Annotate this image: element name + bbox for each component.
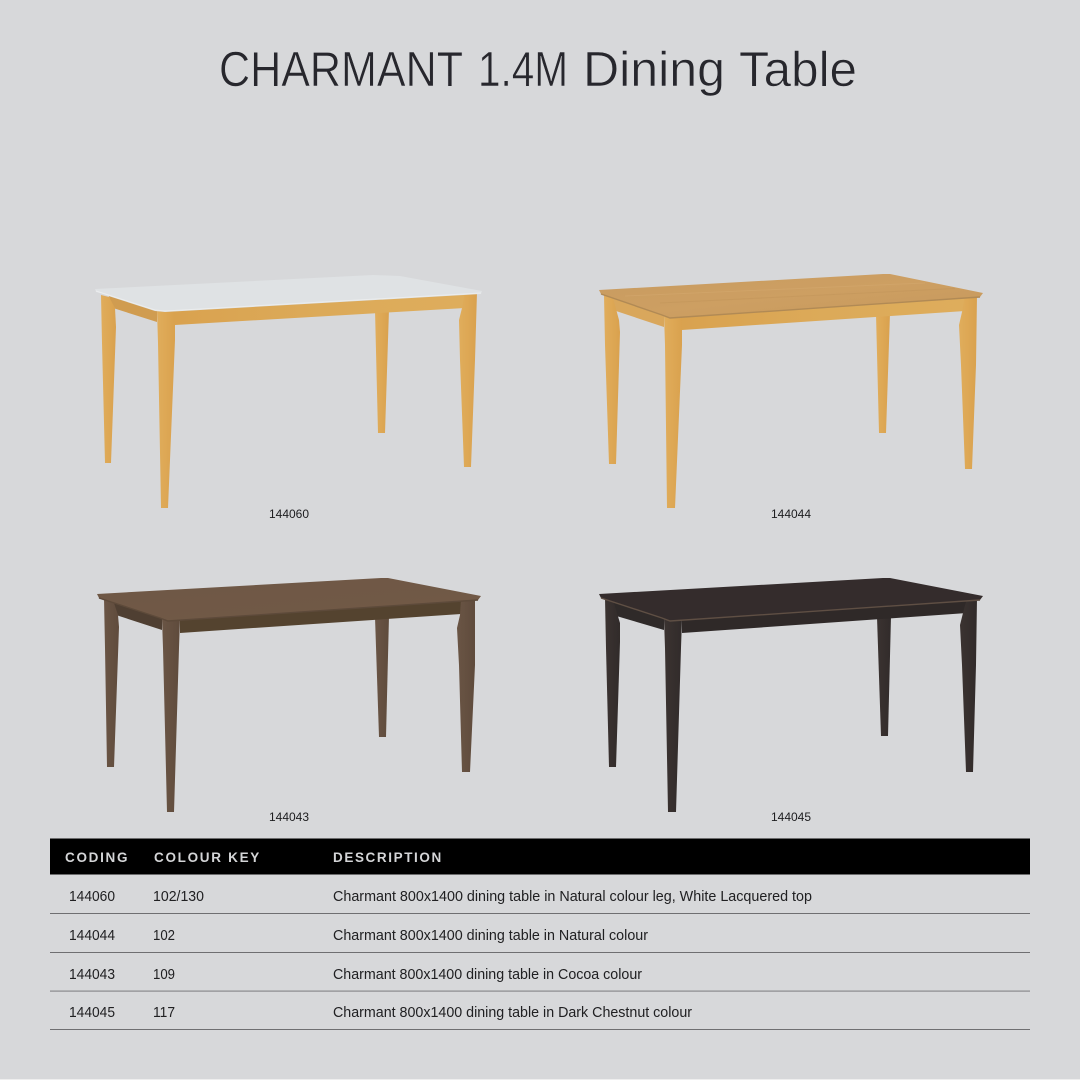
- row: 144060: [50, 889, 1030, 914]
- row: 144060: 144060: [69, 889, 115, 905]
- row: 144044: [50, 928, 1030, 953]
- row: 144045: Charmant 800x1400 dining table in Dark Chestnut colour: [333, 1005, 692, 1021]
- bottom edge strip: [0, 1079, 1080, 1080]
- row: 144044: Charmant 800x1400 dining table in Natural colour: [333, 928, 648, 944]
- row: 144043: 109: [153, 967, 175, 983]
- row: 144045: [50, 1005, 1030, 1030]
- row: 144043: 144043: [69, 967, 115, 983]
- row: 144043: [50, 967, 1030, 992]
- product: table 144043 cocoa: [97, 578, 481, 812]
- row: 144045: 144045: [69, 1005, 115, 1021]
- label: 144043: 144043: [269, 810, 309, 824]
- product: table 144060 natural legs with white top: [95, 275, 482, 508]
- row: 144044: 102: [153, 928, 175, 944]
- product: table 144044 natural: [599, 274, 983, 508]
- row: 144044: 144044: [69, 928, 115, 944]
- title: Dining: [583, 42, 725, 97]
- title: 1.4M: [478, 42, 568, 97]
- table header row: [50, 838, 1030, 874]
- label: 144044: 144044: [771, 507, 811, 521]
- row: 144045: 117: [153, 1005, 175, 1021]
- row: 144060: Charmant 800x1400 dining table in Natural colour leg, White Lacquered top: [333, 889, 812, 905]
- table header row: COLOUR KEY: [154, 850, 261, 865]
- table header row: CODING: [65, 850, 129, 865]
- label: 144060: 144060: [269, 507, 309, 521]
- title: Table: [739, 42, 857, 97]
- row: 144043: Charmant 800x1400 dining table in Cocoa colour: [333, 967, 642, 983]
- title: [219, 42, 857, 97]
- product: table 144045 dark chestnut: [599, 578, 983, 812]
- title: CHARMANT: [219, 42, 463, 97]
- row: 144060: 102/130: [153, 889, 204, 905]
- label: 144045: 144045: [771, 810, 811, 824]
- specification table: [50, 838, 1030, 1030]
- table header row: DESCRIPTION: [333, 850, 443, 865]
